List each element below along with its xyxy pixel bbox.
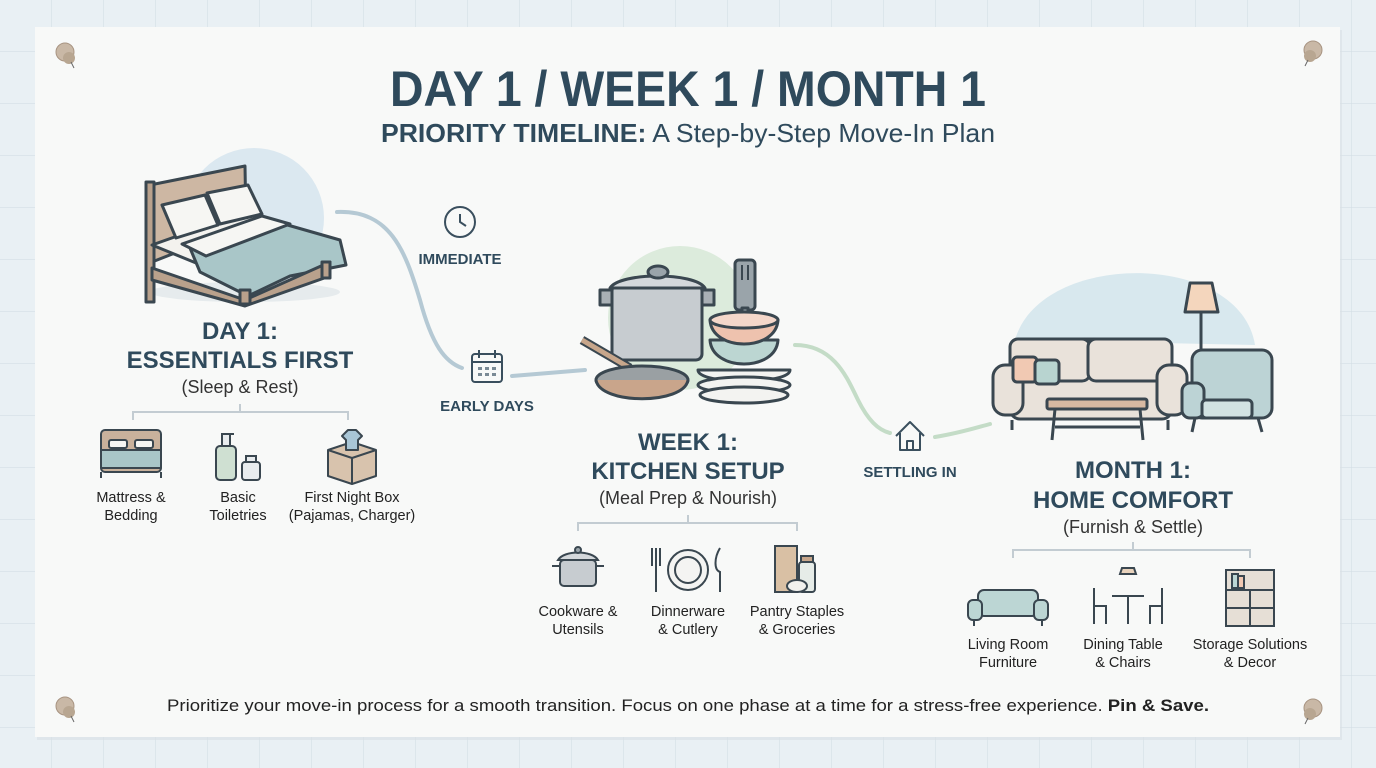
illustration: bed <box>146 148 346 306</box>
text: month 1 items: & Chairs <box>1095 655 1151 671</box>
text: week 1 items: & Cutlery <box>658 622 719 638</box>
text: month 1 items: Storage Solutions <box>1193 637 1307 653</box>
icon: first night box <box>328 430 376 484</box>
icon: pin top-right <box>1304 41 1322 66</box>
icon: calendar <box>472 350 502 382</box>
text: day 1 items: Mattress & <box>96 490 166 506</box>
icon: pantry <box>775 546 815 592</box>
heading: month 1: HOME COMFORT <box>1033 487 1233 514</box>
heading: month 1 <box>1033 457 1233 537</box>
text: day 1 items <box>96 490 415 524</box>
text: week 1 items: Dinnerware <box>651 604 725 620</box>
subtitle: PRIORITY TIMELINE: A Step-by-Step Move-In Plan <box>381 118 995 148</box>
icon: clock <box>445 207 475 237</box>
text: immediate: IMMEDIATE <box>418 251 502 268</box>
icon: cookware <box>552 547 604 586</box>
heading: day 1: DAY 1: <box>202 318 278 345</box>
icon: dinnerware <box>652 548 720 592</box>
text: settling in: SETTLING IN <box>863 464 957 481</box>
text: week 1 items: Cookware & <box>539 604 618 620</box>
icon: sofa <box>968 590 1048 626</box>
text: week 1 items: Utensils <box>552 622 604 638</box>
icon: pin bottom-left <box>56 697 75 722</box>
heading: month 1: MONTH 1: <box>1075 457 1191 484</box>
text: month 1 items <box>968 637 1307 671</box>
heading: week 1: WEEK 1: <box>638 429 738 456</box>
icon: pin top-left <box>56 43 75 68</box>
title: DAY 1 / WEEK 1 / MONTH 1 <box>390 61 986 117</box>
heading: week 1: (Meal Prep & Nourish) <box>599 488 777 508</box>
text: day 1 items: First Night Box <box>304 490 400 506</box>
footer text: Prioritize your move-in process for a smooth transition. Focus on one phase at a time for a stress-free experience. Pin & Save. <box>167 696 1209 715</box>
icon: dining table <box>1094 568 1162 624</box>
heading: day 1 <box>127 318 354 397</box>
text: day 1 items: Bedding <box>104 508 158 524</box>
heading: month 1: (Furnish & Settle) <box>1063 517 1203 537</box>
text: day 1 items: Basic <box>220 490 256 506</box>
illustration: living room <box>993 273 1272 440</box>
icon: house <box>896 422 924 450</box>
text: month 1 items: & Decor <box>1224 655 1276 671</box>
icon: mattress <box>101 430 161 478</box>
arrow: immediate connector <box>337 212 585 376</box>
heading: day 1: ESSENTIALS FIRST <box>127 347 354 374</box>
arrow: settling connector <box>795 345 990 437</box>
icon: toiletries <box>216 434 260 480</box>
bracket: day 1 <box>133 404 348 420</box>
text: week 1 items: Pantry Staples <box>750 604 844 620</box>
bracket: month 1 <box>1013 542 1250 558</box>
heading: day 1: (Sleep & Rest) <box>181 377 299 397</box>
icon: pin bottom-right <box>1304 699 1322 724</box>
heading: week 1 <box>591 429 785 508</box>
text: month 1 items: Living Room <box>968 637 1048 653</box>
text: week 1 items: & Groceries <box>759 622 835 638</box>
bracket: week 1 <box>578 515 797 531</box>
heading: week 1: KITCHEN SETUP <box>591 458 785 485</box>
text: month 1 items: Furniture <box>979 655 1037 671</box>
text: early days: EARLY DAYS <box>440 398 534 415</box>
text: day 1 items: Toiletries <box>209 508 267 524</box>
text: month 1 items: Dining Table <box>1083 637 1163 653</box>
text: week 1 items <box>539 604 844 638</box>
text: day 1 items: (Pajamas, Charger) <box>289 508 415 524</box>
illustration: kitchen <box>582 246 790 403</box>
icon: storage <box>1226 570 1274 626</box>
